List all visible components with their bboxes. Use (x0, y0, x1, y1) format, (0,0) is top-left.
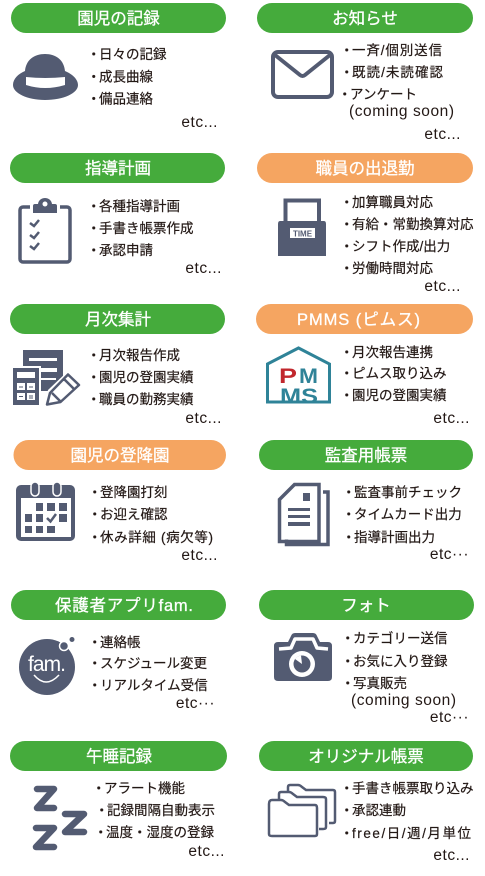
feature list: ・ (342, 530, 356, 545)
panel: オリジナル帳票 (259, 741, 474, 864)
feature list: ・ (92, 781, 106, 796)
heading pill: 園児の記録 (77, 9, 160, 28)
feature list: ・ (341, 631, 354, 646)
feature list: お気に入り登録 (353, 654, 448, 669)
feature list: etc... (424, 126, 461, 143)
feature list: 成長曲線 (99, 70, 153, 84)
icon: ZZZ (36, 789, 84, 847)
heading pill: 保護者アプリfam. (55, 596, 193, 615)
feature list: ・ (88, 485, 102, 500)
heading pill: お知らせ (332, 9, 398, 28)
feature list: etc... (433, 410, 470, 427)
feature list (87, 47, 218, 131)
heading pill (257, 3, 473, 33)
heading pill (10, 304, 225, 334)
feature list (340, 345, 470, 427)
feature list: アラート機能 (104, 781, 185, 796)
icon: folders (269, 785, 335, 836)
feature list: ・ (87, 243, 100, 258)
heading pill (11, 590, 226, 620)
feature list: ・ (342, 485, 356, 500)
feature list: ・ (87, 392, 100, 407)
feature list: 日々の記録 (99, 47, 167, 62)
feature list: ・ (340, 217, 354, 232)
icon: time recorder (278, 200, 326, 256)
feature list: ・ (95, 803, 108, 818)
heading pill: 指導計画 (85, 159, 151, 178)
feature list: etc··· (430, 546, 469, 563)
feature list (88, 484, 218, 564)
feature list: ・ (88, 656, 102, 671)
icon: PMMS house logo: P (279, 365, 297, 388)
feature list: etc... (181, 547, 218, 564)
feature list: タイムカード出力 (354, 507, 462, 522)
heading pill (259, 590, 474, 620)
feature list: 労働時間対応 (352, 261, 433, 276)
feature list (92, 781, 225, 860)
feature list: etc... (188, 843, 225, 860)
panel: 職員の出退勤 (257, 153, 474, 295)
feature list: ・ (87, 348, 100, 363)
feature list: 登降園打刻 (100, 484, 168, 500)
feature list: ・ (340, 43, 354, 58)
feature list: ・ (341, 676, 354, 691)
panel: 指導計画 (10, 153, 225, 277)
feature list: ・ (94, 825, 108, 840)
feature list: 休み詳細 (病欠等) (100, 529, 213, 545)
heading pill (10, 153, 225, 183)
heading pill: フォト (341, 597, 391, 615)
feature list: etc... (185, 410, 222, 427)
feature list: ・ (340, 826, 354, 841)
icon: PMMS house logo: MS (280, 385, 318, 408)
icon: documents (280, 484, 328, 544)
feature list: 各種指導計画 (99, 199, 180, 214)
icon: hat (13, 54, 78, 100)
feature list: カテゴリー送信 (353, 630, 448, 646)
feature list: ピムス取り込み (352, 366, 446, 381)
panel: 午睡記録 (10, 741, 227, 860)
heading pill (14, 440, 226, 470)
feature list: ・ (87, 47, 100, 62)
icon: envelope (273, 52, 332, 97)
feature list: ・ (342, 507, 356, 522)
feature list: 既読/未読確認 (352, 65, 444, 80)
feature list: (coming soon) (351, 692, 456, 709)
feature list: ・ (88, 507, 102, 522)
icon: PMMS house logo (268, 348, 330, 408)
icon: PMMS house logo: M (299, 365, 318, 388)
feature list: ・ (340, 239, 354, 254)
feature list: etc··· (430, 709, 469, 726)
feature list (340, 781, 474, 864)
heading pill: オリジナル帳票 (308, 747, 424, 766)
feature list: 月次報告連携 (352, 345, 433, 360)
feature list: ・ (340, 195, 354, 210)
feature list: 温度・湿度の登録 (106, 825, 214, 840)
feature list: ・ (88, 678, 102, 693)
feature list: ・ (87, 92, 100, 106)
feature list: etc... (433, 847, 470, 864)
feature list: etc··· (176, 695, 215, 712)
feature list: ・ (340, 366, 354, 381)
feature list: 園児の登園実績 (99, 370, 194, 385)
icon: calendar (16, 482, 75, 541)
panel: 園児の記録 (11, 3, 226, 131)
feature list: 加算職員対応 (352, 195, 433, 210)
feature list (87, 348, 222, 427)
feature list: etc... (424, 278, 461, 295)
feature list: ・ (340, 781, 354, 796)
feature list: ・ (87, 221, 100, 236)
icon: clipboard (20, 198, 70, 262)
panel: 保護者アプリfam. (11, 590, 226, 712)
feature list: シフト作成/出力 (352, 239, 450, 254)
heading pill (259, 440, 473, 470)
feature list: free/日/週/月単位 (352, 826, 472, 841)
feature list: ・ (340, 261, 354, 276)
heading pill (257, 153, 473, 183)
feature list (342, 484, 469, 563)
panel: 月次集計 (10, 304, 225, 427)
feature list: 写真販売 (353, 676, 407, 691)
heading pill: 月次集計 (85, 310, 152, 329)
heading pill: 午睡記録 (86, 747, 152, 766)
heading pill: PMMS (ピムス) (297, 311, 420, 329)
feature list (338, 42, 461, 143)
feature list: ・ (88, 530, 102, 545)
heading pill (10, 741, 227, 771)
panel: フォト (259, 590, 474, 726)
feature list: 指導計画出力 (354, 530, 435, 545)
icon: calculator, document and pencil (13, 350, 82, 407)
heading pill (11, 3, 226, 33)
icon: time recorder: TIME (293, 230, 313, 238)
feature list: ・ (340, 65, 354, 80)
feature list: 承認連動 (352, 803, 406, 818)
panel: 園児の登降園 (14, 440, 226, 564)
feature list: 記録間隔自動表示 (107, 803, 215, 818)
icon: fam logo (19, 637, 75, 695)
feature list: スケジュール変更 (100, 656, 208, 671)
feature list: リアルタイム受信 (100, 678, 208, 693)
feature list: 承認申請 (99, 243, 153, 258)
feature list: 連絡帳 (100, 635, 141, 650)
feature list: 手書き帳票作成 (99, 221, 194, 236)
feature list: (coming soon) (349, 103, 454, 120)
feature list: 職員の勤務実績 (99, 392, 194, 407)
feature list (87, 199, 222, 277)
panel: お知らせ (257, 3, 473, 143)
panel: PMMS (256, 304, 473, 427)
feature list: ・ (88, 635, 102, 650)
feature list: 有給・常勤換算対応 (352, 217, 474, 232)
icon: camera (274, 633, 332, 681)
icon: fam logo: fam. (28, 653, 66, 676)
heading pill (256, 304, 473, 334)
heading pill: 監査用帳票 (325, 446, 407, 465)
feature list: ・ (340, 345, 354, 360)
feature list: ・ (338, 87, 352, 102)
feature list (88, 635, 215, 712)
feature list: ・ (87, 70, 100, 84)
feature list: 監査事前チェック (354, 484, 462, 500)
feature list: etc... (185, 260, 222, 277)
panel: 監査用帳票 (259, 440, 473, 563)
feature list: 月次報告作成 (99, 348, 180, 363)
feature list: ・ (87, 199, 100, 214)
feature list: ・ (340, 803, 354, 818)
feature list: ・ (340, 388, 354, 403)
feature list: お迎え確認 (100, 507, 168, 522)
heading pill: 園児の登降園 (70, 446, 170, 465)
feature list: etc... (181, 114, 218, 131)
feature list: 備品連絡 (99, 92, 153, 106)
feature list: 手書き帳票取り込み (352, 781, 474, 796)
feature list (340, 195, 474, 295)
feature list: 一斉/個別送信 (352, 42, 442, 58)
heading pill (259, 741, 473, 771)
feature list: ・ (341, 654, 354, 669)
feature list (341, 630, 469, 726)
feature list: アンケート (350, 87, 417, 102)
feature list: 園児の登園実績 (352, 388, 447, 403)
heading pill: 職員の出退勤 (316, 159, 414, 178)
feature list: ・ (87, 370, 100, 385)
